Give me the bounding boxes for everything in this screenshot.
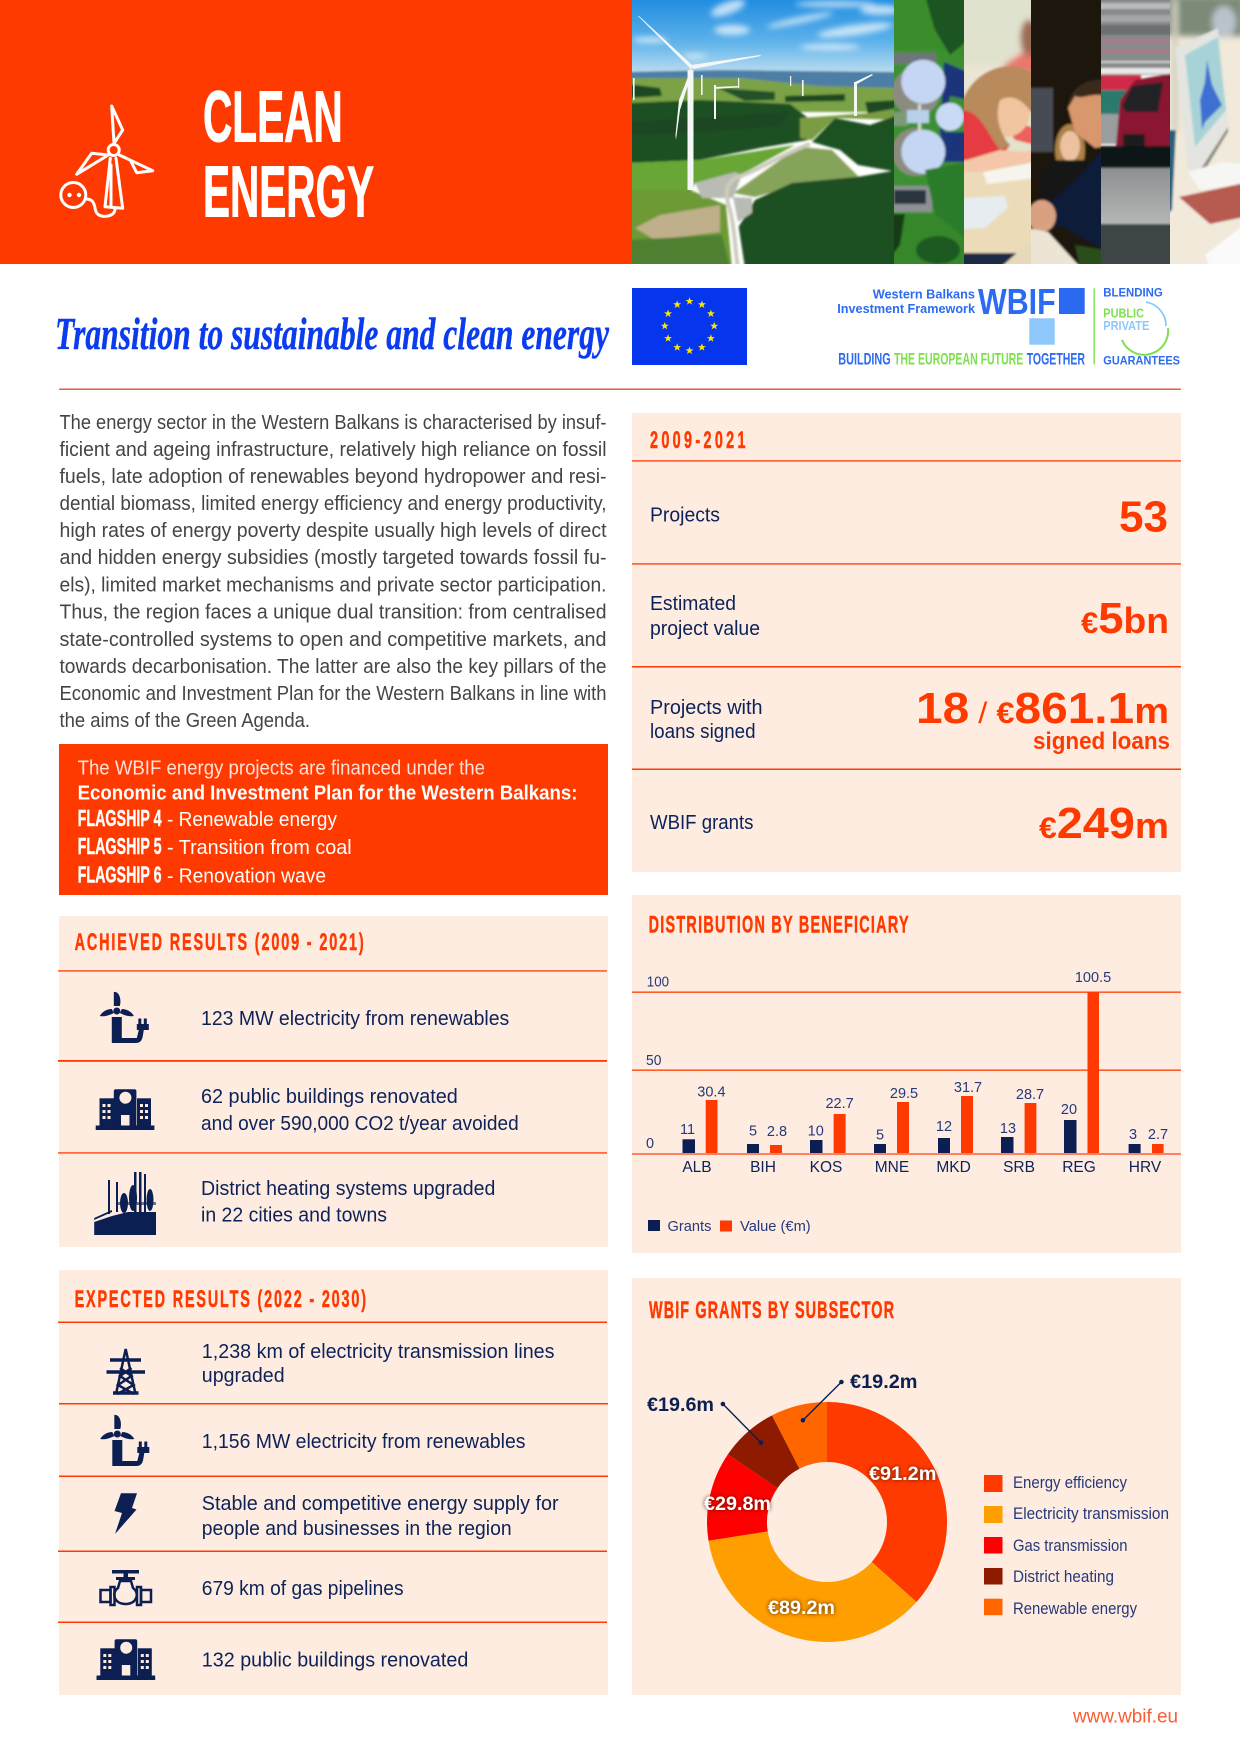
stat: projects: 53 xyxy=(1119,493,1168,542)
text: transmission lines: 1,238 km of electricity transmission lines xyxy=(202,1341,555,1363)
bar chart xyxy=(632,970,1181,1176)
bar chart: HRV xyxy=(1129,1159,1162,1176)
photo: wind farm landscape xyxy=(628,0,900,268)
donut chart: €19.6m xyxy=(647,1395,714,1416)
WBIF logo: PUBLIC xyxy=(1103,306,1145,321)
donut chart xyxy=(647,1372,947,1642)
WBIF logo: BLENDING xyxy=(1103,288,1163,300)
bar chart: BIH xyxy=(750,1159,776,1176)
text: district heating achieved: District heating systems upgraded xyxy=(201,1178,495,1200)
stat: estimated value xyxy=(650,593,1169,643)
intro paragraph xyxy=(60,412,607,732)
bar chart: MNE xyxy=(875,1159,909,1176)
WBIF logo: PRIVATE xyxy=(1103,318,1150,333)
WBIF logo: Western Balkans xyxy=(873,286,975,301)
heading: period: 2009-2021 xyxy=(650,427,746,454)
heading: achieved results: ACHIEVED RESULTS (2009 - 2021) xyxy=(75,929,364,956)
legend: subsectors xyxy=(984,1474,1169,1618)
legend: subsectors: Electricity transmission xyxy=(1013,1505,1169,1523)
tagline: Transition to sustainable and clean energy xyxy=(55,308,609,359)
text: district heating achieved xyxy=(201,1178,495,1227)
WBIF logo: Investment Framework xyxy=(837,301,976,316)
WBIF logo: TOGETHER xyxy=(1027,350,1085,368)
text: energy supply xyxy=(202,1493,559,1540)
bar chart: 10 xyxy=(808,1124,824,1140)
bar chart: KOS xyxy=(810,1159,842,1176)
EU flag xyxy=(632,288,747,365)
bar chart: REG xyxy=(1062,1159,1096,1176)
bar chart: 2.7 xyxy=(1148,1127,1168,1143)
bar chart: 100 xyxy=(647,975,669,991)
bar chart: MKD xyxy=(936,1159,971,1176)
stat: estimated value: €5bn xyxy=(1081,594,1169,643)
icon: public building xyxy=(96,1639,155,1680)
legend: grants and value: Grants xyxy=(668,1218,711,1235)
photo: computer showing map of Europe xyxy=(1166,0,1240,268)
stat: signed loans: signed loans xyxy=(1033,728,1170,755)
intro paragraph: els), limited market mechanisms and private sector participation. xyxy=(60,575,606,597)
intro paragraph: dential biomass, limited energy efficiency and energy productivity, xyxy=(60,493,606,515)
header banner xyxy=(0,0,632,264)
title: CLEAN xyxy=(203,78,343,158)
stat: signed loans: Projects with xyxy=(650,697,762,719)
legend: subsectors: Renewable energy xyxy=(1013,1600,1138,1618)
WBIF logo: BUILDING xyxy=(838,350,891,368)
stat: signed loans: 18 / €861.1 m xyxy=(916,684,1169,733)
icon: lightning bolt xyxy=(114,1493,137,1534)
legend: subsectors: Gas transmission xyxy=(1013,1537,1128,1555)
WBIF logo: THE EUROPEAN FUTURE xyxy=(894,350,1023,368)
WBIF logo: GUARANTEES xyxy=(1103,355,1180,367)
intro paragraph: fuels, late adoption of renewables beyond hydropower and resi- xyxy=(60,466,606,488)
legend: subsectors: Energy efficiency xyxy=(1013,1474,1128,1492)
intro paragraph: towards decarbonisation. The latter are also the key pillars of the xyxy=(60,656,606,678)
panel: distribution by beneficiary xyxy=(632,895,1181,1253)
text: buildings achieved: 62 public buildings renovated xyxy=(201,1086,458,1108)
text: energy supply: Stable and competitive energy supply for xyxy=(202,1493,559,1515)
callout: flagships: - Renovation wave xyxy=(167,866,326,888)
legend: grants and value xyxy=(648,1218,811,1235)
intro paragraph: ficient and ageing infrastructure, relatively high reliance on fossil xyxy=(60,439,606,461)
panel: expected results xyxy=(58,1270,608,1695)
callout: flagships: - Renewable energy xyxy=(167,809,337,831)
text: buildings expected: 132 public buildings renovated xyxy=(202,1650,468,1672)
photo: train at station xyxy=(1101,0,1170,264)
bar chart: 20 xyxy=(1061,1102,1077,1118)
bar chart: 5 xyxy=(876,1128,884,1144)
heading: expected results: EXPECTED RESULTS (2022 - 2030) xyxy=(75,1286,366,1313)
stat: signed loans: loans signed xyxy=(650,721,756,743)
stat: projects xyxy=(650,493,1168,542)
icon: gas valve xyxy=(100,1570,151,1605)
photo: girl studying xyxy=(964,0,1031,264)
title xyxy=(203,78,374,233)
bar chart: 31.7 xyxy=(954,1080,982,1096)
text: renewables expected: 1,156 MW electricity from renewables xyxy=(202,1431,526,1453)
bar chart: 12 xyxy=(936,1119,952,1135)
text: renewables achieved: 123 MW electricity from renewables xyxy=(201,1008,509,1030)
heading: subsector: WBIF GRANTS BY SUBSECTOR xyxy=(649,1297,894,1324)
bar chart: 5 xyxy=(749,1124,757,1140)
callout: flagships: FLAGSHIP 6 xyxy=(78,862,162,888)
intro paragraph: Economic and Investment Plan for the Western Balkans in line with xyxy=(60,683,606,705)
icon: turbine plug xyxy=(100,1415,149,1466)
intro paragraph: and hidden energy subsidies (mostly targeted towards fossil fu- xyxy=(60,547,606,569)
panel: achieved results xyxy=(58,916,608,1247)
photo: people looking at document xyxy=(1031,0,1101,264)
donut chart: €91.2m xyxy=(869,1464,936,1485)
callout: flagships xyxy=(59,744,608,895)
bar chart: 22.7 xyxy=(825,1096,854,1112)
intro paragraph: Thus, the region faces a unique dual transition: from centralised xyxy=(60,602,606,624)
icon: district heating plant xyxy=(94,1172,156,1235)
stat: projects: Projects xyxy=(650,505,720,527)
bar chart: 0 xyxy=(646,1136,654,1152)
callout: flagships: FLAGSHIP 5 xyxy=(78,833,162,859)
donut chart: €19.2m xyxy=(850,1372,918,1393)
callout: flagships: - Transition from coal xyxy=(167,837,352,859)
callout: flagships: The WBIF energy projects are financed under the xyxy=(78,757,485,779)
text: gas pipelines: 679 km of gas pipelines xyxy=(202,1578,404,1600)
WBIF logo: WBIF xyxy=(978,281,1056,322)
icon: wind turbine with plug xyxy=(61,106,153,216)
bar chart: SRB xyxy=(1003,1159,1035,1176)
bar chart: 100.5 xyxy=(1075,970,1111,986)
stat: grants: €249m xyxy=(1039,799,1169,848)
icon: transmission pylon xyxy=(106,1349,145,1394)
intro paragraph: The energy sector in the Western Balkans is characterised by insuf- xyxy=(60,412,606,434)
bar chart: 2.8 xyxy=(767,1124,787,1140)
text: buildings achieved: and over 590,000 CO2 t/year avoided xyxy=(201,1113,519,1135)
icon: turbine plug xyxy=(100,992,149,1043)
website link: www.wbif.eu xyxy=(1072,1707,1178,1728)
bar chart: 30.4 xyxy=(697,1085,726,1101)
text: transmission lines xyxy=(202,1341,555,1387)
text: transmission lines: upgraded xyxy=(202,1365,285,1387)
icon: public building xyxy=(96,1089,154,1130)
text: buildings achieved xyxy=(201,1086,519,1135)
heading: distribution: DISTRIBUTION BY BENEFICIARY xyxy=(649,912,909,939)
intro paragraph: state-controlled systems to open and competitive markets, and xyxy=(60,629,606,651)
legend: grants and value: Value (€m) xyxy=(740,1218,811,1235)
intro paragraph: the aims of the Green Agenda. xyxy=(60,710,310,732)
bar chart: 50 xyxy=(646,1053,661,1069)
bar chart: 29.5 xyxy=(890,1086,918,1102)
stat: estimated value: Estimated xyxy=(650,593,736,615)
stat: signed loans xyxy=(650,684,1170,755)
bar chart: ALB xyxy=(682,1159,712,1176)
text: district heating achieved: in 22 cities and towns xyxy=(201,1205,387,1227)
callout: flagships: FLAGSHIP 4 xyxy=(78,805,162,831)
WBIF logo xyxy=(837,281,1180,368)
bar chart: 11 xyxy=(680,1122,695,1138)
photo: aerial view of digesters xyxy=(894,0,964,264)
bar chart: 28.7 xyxy=(1016,1087,1044,1103)
legend: subsectors: District heating xyxy=(1013,1568,1114,1586)
stat: estimated value: project value xyxy=(650,618,760,640)
panel: grants by subsector xyxy=(632,1278,1181,1695)
text: energy supply: people and businesses in the region xyxy=(202,1518,512,1540)
donut chart: €29.8m xyxy=(704,1494,771,1515)
donut chart: €89.2m xyxy=(768,1598,835,1619)
stat: grants xyxy=(650,799,1169,848)
intro paragraph: high rates of energy poverty despite usually high levels of direct xyxy=(60,520,607,542)
title: ENERGY xyxy=(203,153,374,233)
callout: flagships: Economic and Investment Plan for the Western Balkans: xyxy=(78,782,577,804)
bar chart: 3 xyxy=(1129,1127,1137,1143)
bar chart: 13 xyxy=(1000,1121,1016,1137)
stat: grants: WBIF grants xyxy=(650,812,754,834)
panel: key figures 2009-2021 xyxy=(632,413,1181,872)
